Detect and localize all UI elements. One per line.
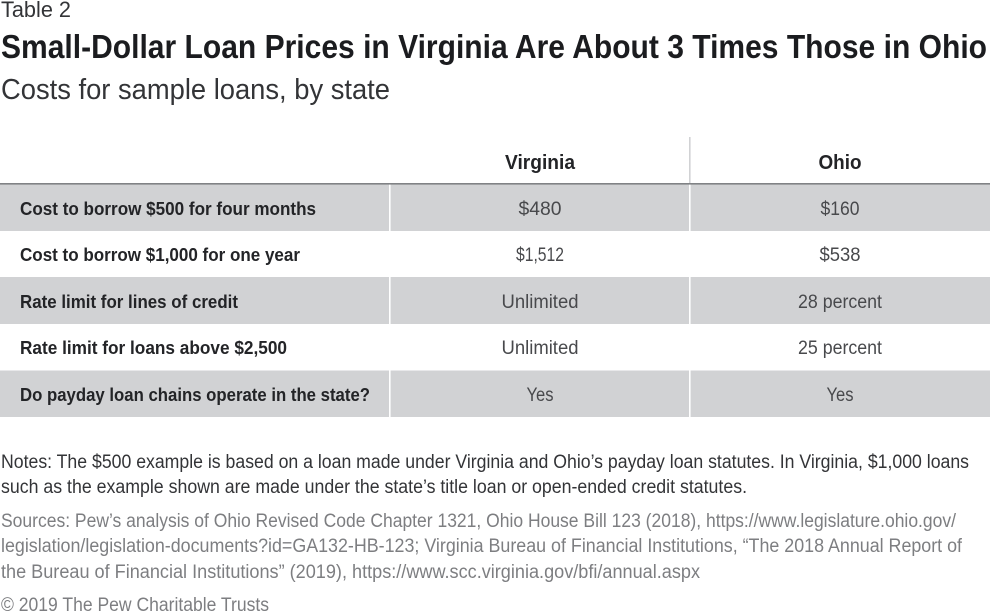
row 4: 25 percent [798, 338, 883, 359]
row 1: $480 [518, 199, 562, 220]
row 3 [20, 291, 883, 313]
row 2: Cost to borrow $1,000 for one year [20, 244, 300, 265]
row 3: Unlimited [502, 292, 578, 313]
row 4: Unlimited [502, 338, 578, 359]
row 4 [20, 337, 883, 359]
row 2: $1,512 [516, 245, 564, 266]
row 3: Rate limit for lines of credit [20, 291, 238, 312]
row 3: 28 percent [798, 292, 883, 313]
row 5: Yes [826, 385, 854, 406]
subtitle: Costs for sample loans, by state [1, 74, 390, 106]
row 4: Rate limit for loans above $2,500 [20, 337, 287, 358]
row 1 [20, 198, 860, 220]
row 1: Cost to borrow $500 for four months [20, 198, 316, 219]
notes: such as the example shown are made under the state’s title loan or open-ended credit statutes. [1, 477, 747, 498]
row 5: Yes [526, 385, 554, 406]
row 5: Do payday loan chains operate in the state? [20, 384, 370, 405]
column header: Virginia: Virginia [505, 152, 576, 174]
sources: the Bureau of Financial Institutions” (2019), https://www.scc.virginia.gov/bfi/annual.aspx [1, 562, 700, 583]
row 1: $160 [820, 199, 860, 220]
row 2 [20, 244, 860, 266]
column header: Ohio: Ohio [818, 152, 862, 174]
row 2: $538 [820, 245, 860, 266]
row 5 [20, 384, 854, 406]
sources [1, 511, 963, 583]
notes [1, 452, 969, 498]
table [0, 137, 990, 417]
row backgrounds [0, 137, 990, 417]
